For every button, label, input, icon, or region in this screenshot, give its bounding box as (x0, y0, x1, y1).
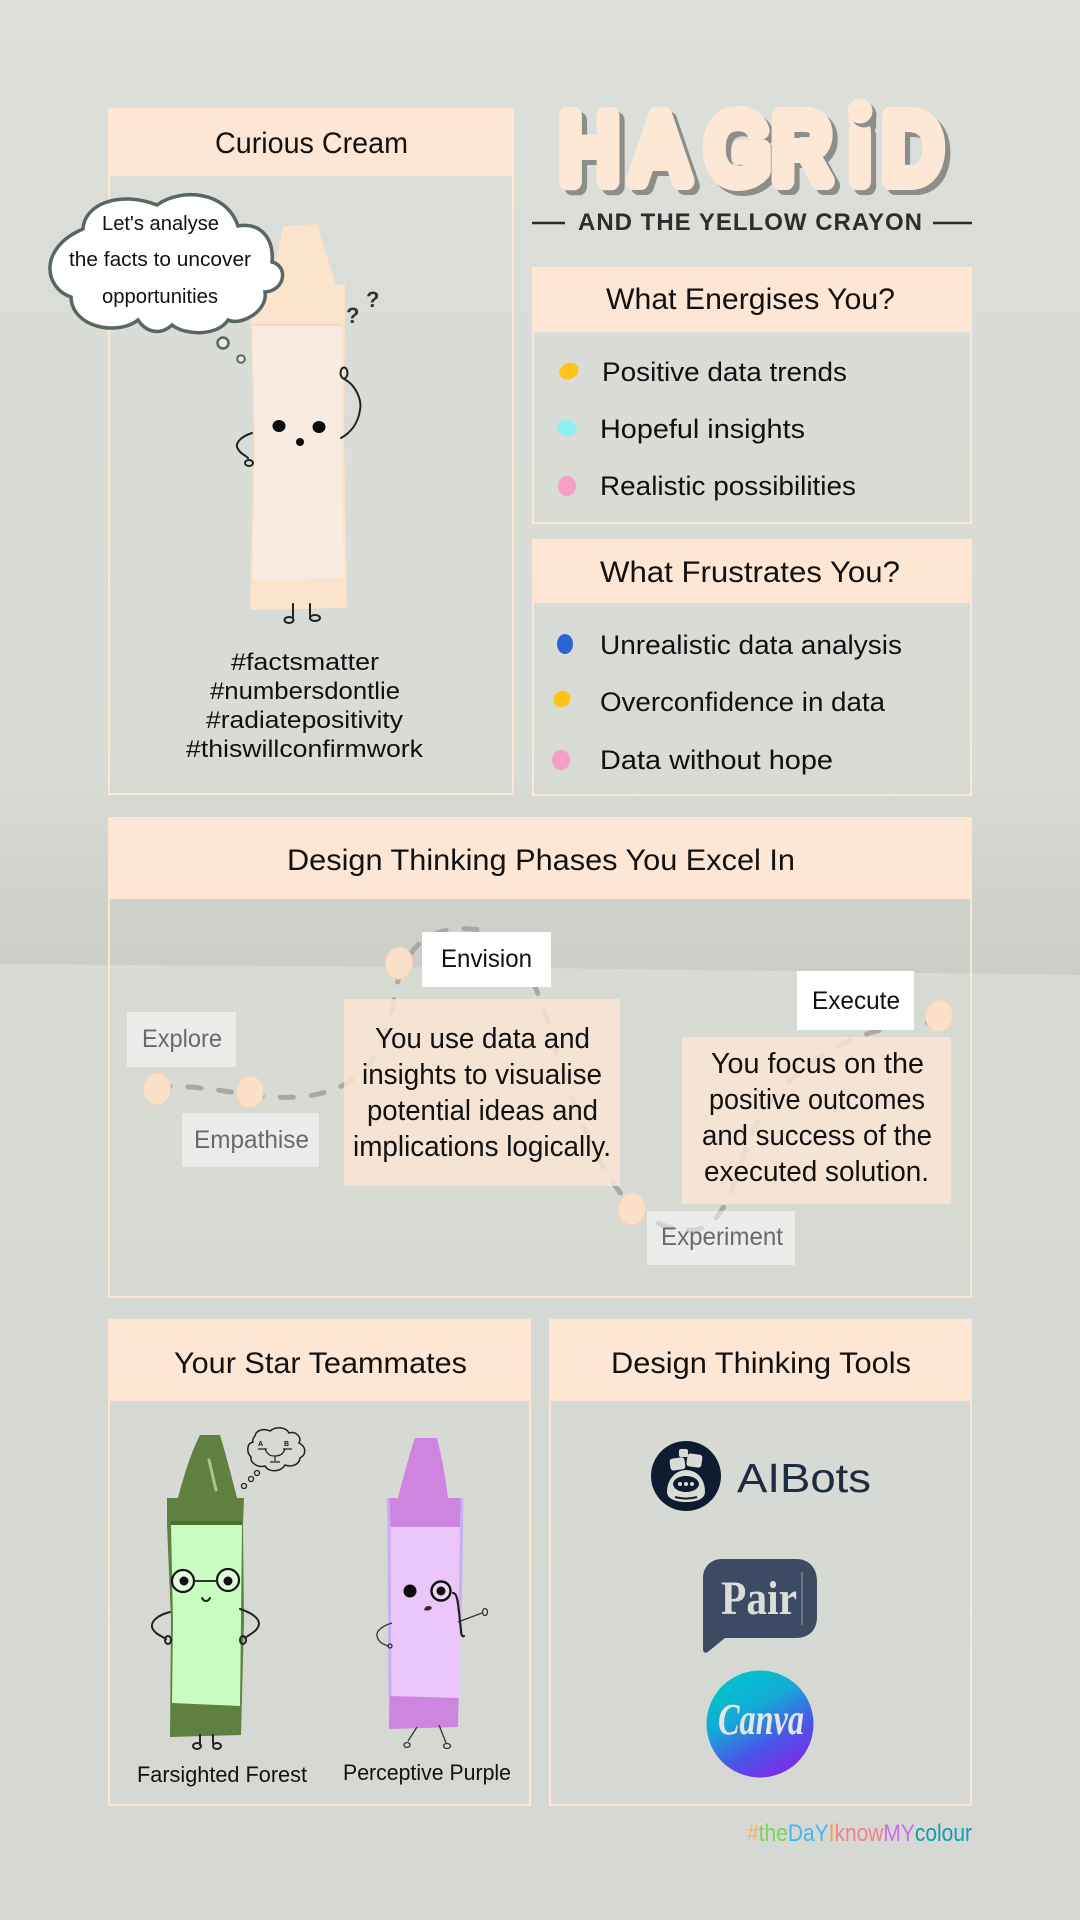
logo: AIBots (651, 1441, 871, 1511)
description: Envision: insights to visualise (362, 1059, 602, 1091)
hashtags: #numbersdontlie (210, 678, 400, 705)
list item: Overconfidence in data: Overconfidence in data (600, 687, 886, 717)
callout: thought bubble: the facts to uncover (69, 249, 251, 271)
description: Execute (682, 1037, 951, 1204)
step dot: Experiment (617, 1192, 647, 1226)
heading: What Frustrates You?: What Frustrates You? (600, 556, 900, 589)
title: HAGRiD: HAGRiD (565, 100, 947, 206)
description: Envision: You use data and (375, 1023, 590, 1055)
illustration: cream crayon: ? (366, 287, 379, 312)
logo: Pair: Pair (721, 1572, 797, 1625)
label: Experiment (647, 1211, 795, 1265)
illustration: purple crayon (377, 1438, 488, 1748)
step dot: Execute (924, 999, 954, 1033)
icon: thought cloud (242, 1428, 305, 1488)
caption: Farsighted Forest: Farsighted Forest (137, 1762, 307, 1787)
list item: Hopeful insights: Hopeful insights (600, 414, 805, 444)
label: Explore: Explore (142, 1025, 222, 1053)
panel: Curious Cream (50, 108, 514, 794)
step dot: Explore (142, 1072, 172, 1106)
panel: Design Thinking Tools (549, 1319, 972, 1805)
description: Envision: potential ideas and (367, 1095, 598, 1127)
description: Execute: positive outcomes (709, 1084, 925, 1116)
label: Execute: Execute (812, 987, 900, 1015)
panel: Design Thinking Phases (108, 817, 972, 1297)
callout: thought bubble (50, 195, 283, 363)
illustration: cream crayon: ? (346, 303, 359, 328)
caption: Perceptive Purple: Perceptive Purple (343, 1760, 511, 1785)
heading: Your Star Teammates: Your Star Teammates (174, 1347, 467, 1380)
description: Execute: executed solution. (704, 1156, 929, 1188)
callout: thought bubble: opportunities (102, 286, 218, 308)
heading: What Energises You?: What Energises You? (606, 283, 895, 316)
illustration: cream crayon (237, 224, 379, 623)
hashtags: #radiatepositivity (206, 707, 403, 734)
description: Envision (344, 999, 620, 1186)
step dot: Empathise (235, 1075, 265, 1109)
heading: Design Thinking Tools: Design Thinking Tools (611, 1347, 911, 1380)
heading: Curious Cream: Curious Cream (215, 127, 408, 160)
list item: Realistic possibilities: Realistic possibilities (600, 471, 856, 501)
label: Empathise (182, 1113, 319, 1167)
footer hashtag: #theDaYIknowMYcolour (747, 1820, 972, 1847)
list item: Positive data trends: Positive data trends (602, 357, 847, 387)
label: Execute (797, 971, 914, 1030)
panel: Your Star Teammates (108, 1319, 531, 1805)
panel: What Energises You? (532, 267, 972, 523)
description: Envision: implications logically. (353, 1131, 611, 1163)
logo: Canva: Canva (718, 1695, 804, 1744)
label: Experiment: Experiment (661, 1223, 783, 1251)
callout: thought bubble: Let's analyse (102, 213, 219, 235)
label: Envision: Envision (441, 945, 532, 973)
list item: Unrealistic data analysis: Unrealistic data analysis (600, 630, 902, 660)
panel: What Frustrates You? (532, 539, 972, 795)
description: Execute: You focus on the (711, 1048, 924, 1080)
list item: Data without hope: Data without hope (600, 745, 833, 775)
dashed journey path (157, 929, 939, 1230)
hashtags: #factsmatter (231, 649, 379, 676)
logo: Canva (706, 1670, 814, 1778)
step dot: Envision (384, 946, 414, 980)
logo: Pair (703, 1559, 817, 1653)
logo: AIBots: AIBots (737, 1455, 871, 1501)
illustration: green crayon (152, 1428, 305, 1749)
icon: thought cloud: B (284, 1441, 289, 1448)
hashtags: #thiswillconfirmwork (186, 736, 424, 763)
label: Explore (127, 1012, 236, 1067)
label: Envision (422, 932, 551, 987)
label: Empathise: Empathise (194, 1126, 309, 1154)
description: Execute: and success of the (702, 1120, 932, 1152)
title: HAGRiD: HAGRiD (560, 95, 941, 201)
icon: thought cloud: A (258, 1441, 263, 1448)
subtitle: AND THE YELLOW CRAYON (578, 209, 922, 236)
hashtags (186, 649, 424, 763)
heading: Design Thinking Phases You Excel In: Design Thinking Phases You Excel In (287, 844, 795, 877)
